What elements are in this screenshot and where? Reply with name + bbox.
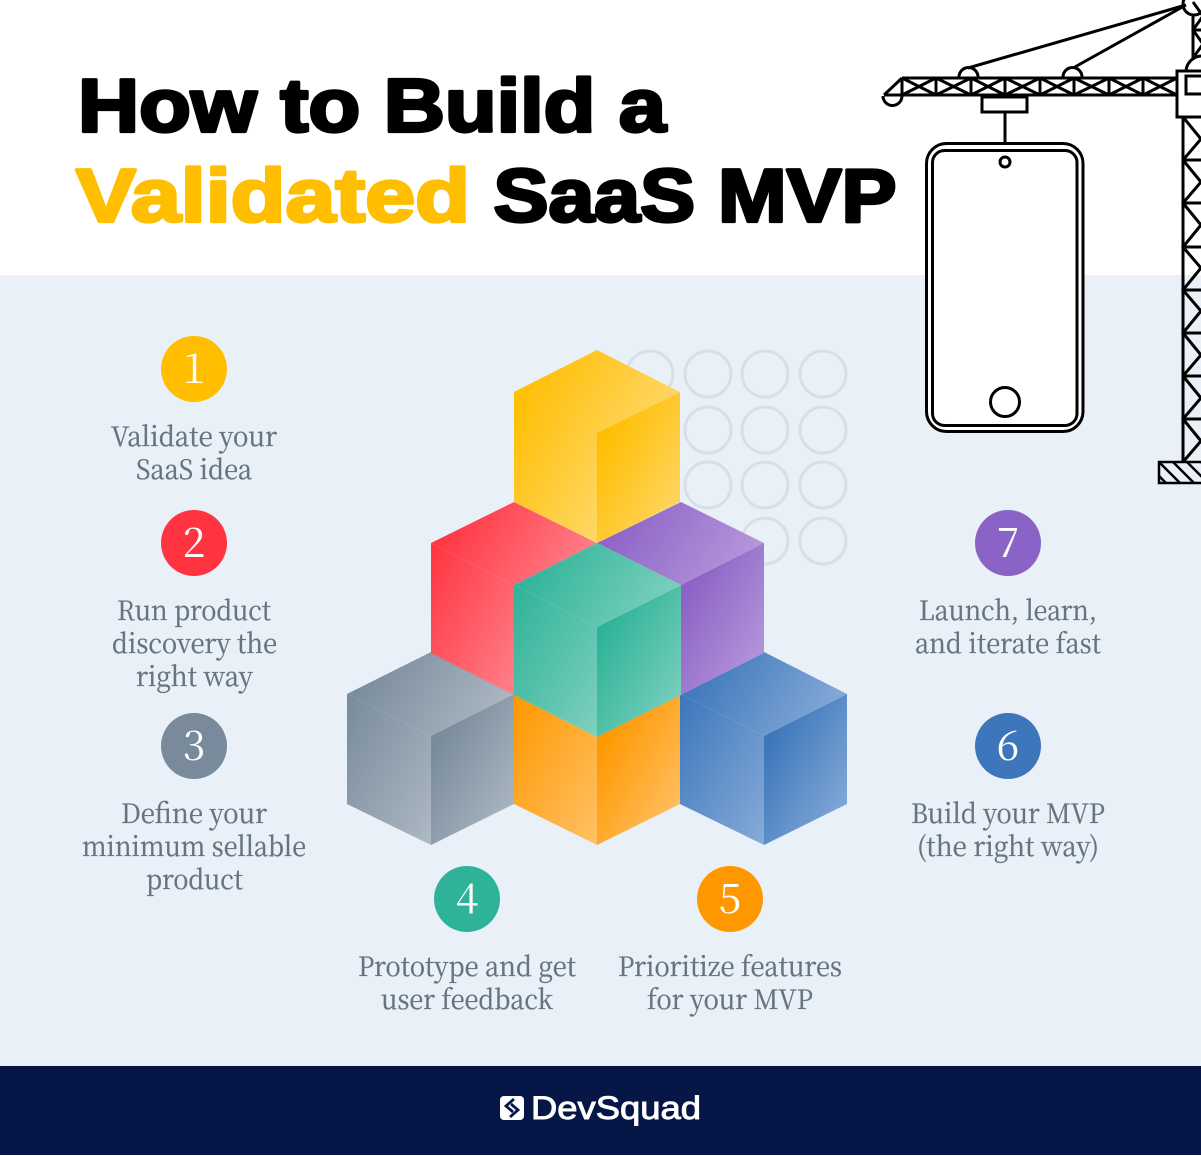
crane base (1159, 462, 1201, 483)
icon: DevSquad logo (500, 1096, 524, 1120)
step 2: discovery the (112, 622, 277, 661)
step 6: 6 (997, 713, 1019, 772)
step 7: Launch, learn, (919, 589, 1097, 628)
step 6 (911, 713, 1105, 864)
isometric cube stack (347, 350, 847, 845)
phone (926, 144, 1083, 432)
title (76, 64, 896, 238)
cube: orange (514, 695, 680, 845)
step 2 (112, 510, 277, 694)
cube: red (431, 502, 597, 695)
step 3 (82, 713, 306, 897)
logo wordmark: DevSquad (531, 1090, 701, 1126)
step 7 (915, 510, 1101, 661)
step 4: user feedback (381, 978, 554, 1017)
title: Validated (76, 154, 470, 238)
step 1: 1 (183, 336, 205, 395)
step 4 (358, 866, 576, 1017)
footer bar (0, 1066, 1201, 1155)
crane and hanging phone illustration (883, 0, 1201, 483)
step 3: product (146, 858, 243, 897)
step 3: minimum sellable (82, 825, 306, 864)
step 5 (618, 866, 842, 1017)
step 1: SaaS idea (136, 448, 252, 487)
light blue content panel (0, 275, 1201, 1066)
step 2: 2 (183, 510, 205, 569)
cube: gray (347, 652, 514, 845)
title: SaaS MVP (494, 154, 896, 238)
step 2: right way (136, 655, 253, 694)
cube: blue (680, 652, 847, 845)
step 5: Prioritize features (618, 945, 842, 984)
step 5: for your MVP (647, 978, 813, 1017)
decorative circle grid (627, 351, 846, 564)
title: How to Build a (78, 64, 667, 148)
cube: green (514, 543, 681, 737)
step 1: Validate your (111, 415, 277, 454)
cube: purple (597, 502, 764, 695)
step 2: Run product (117, 589, 271, 628)
step 3: 3 (183, 713, 205, 772)
step 1 (111, 336, 277, 487)
step 3: Define your (121, 792, 267, 831)
step 4: 4 (456, 866, 478, 925)
step 5: 5 (719, 866, 741, 925)
step 6: (the right way) (917, 825, 1099, 864)
crane tower and cab (1177, 0, 1201, 462)
step 7: and iterate fast (915, 622, 1101, 661)
step 6: Build your MVP (911, 792, 1105, 831)
cube: yellow (514, 350, 680, 543)
step 4: Prototype and get (358, 945, 576, 984)
crane jib (883, 5, 1186, 143)
step 7: 7 (997, 510, 1019, 569)
